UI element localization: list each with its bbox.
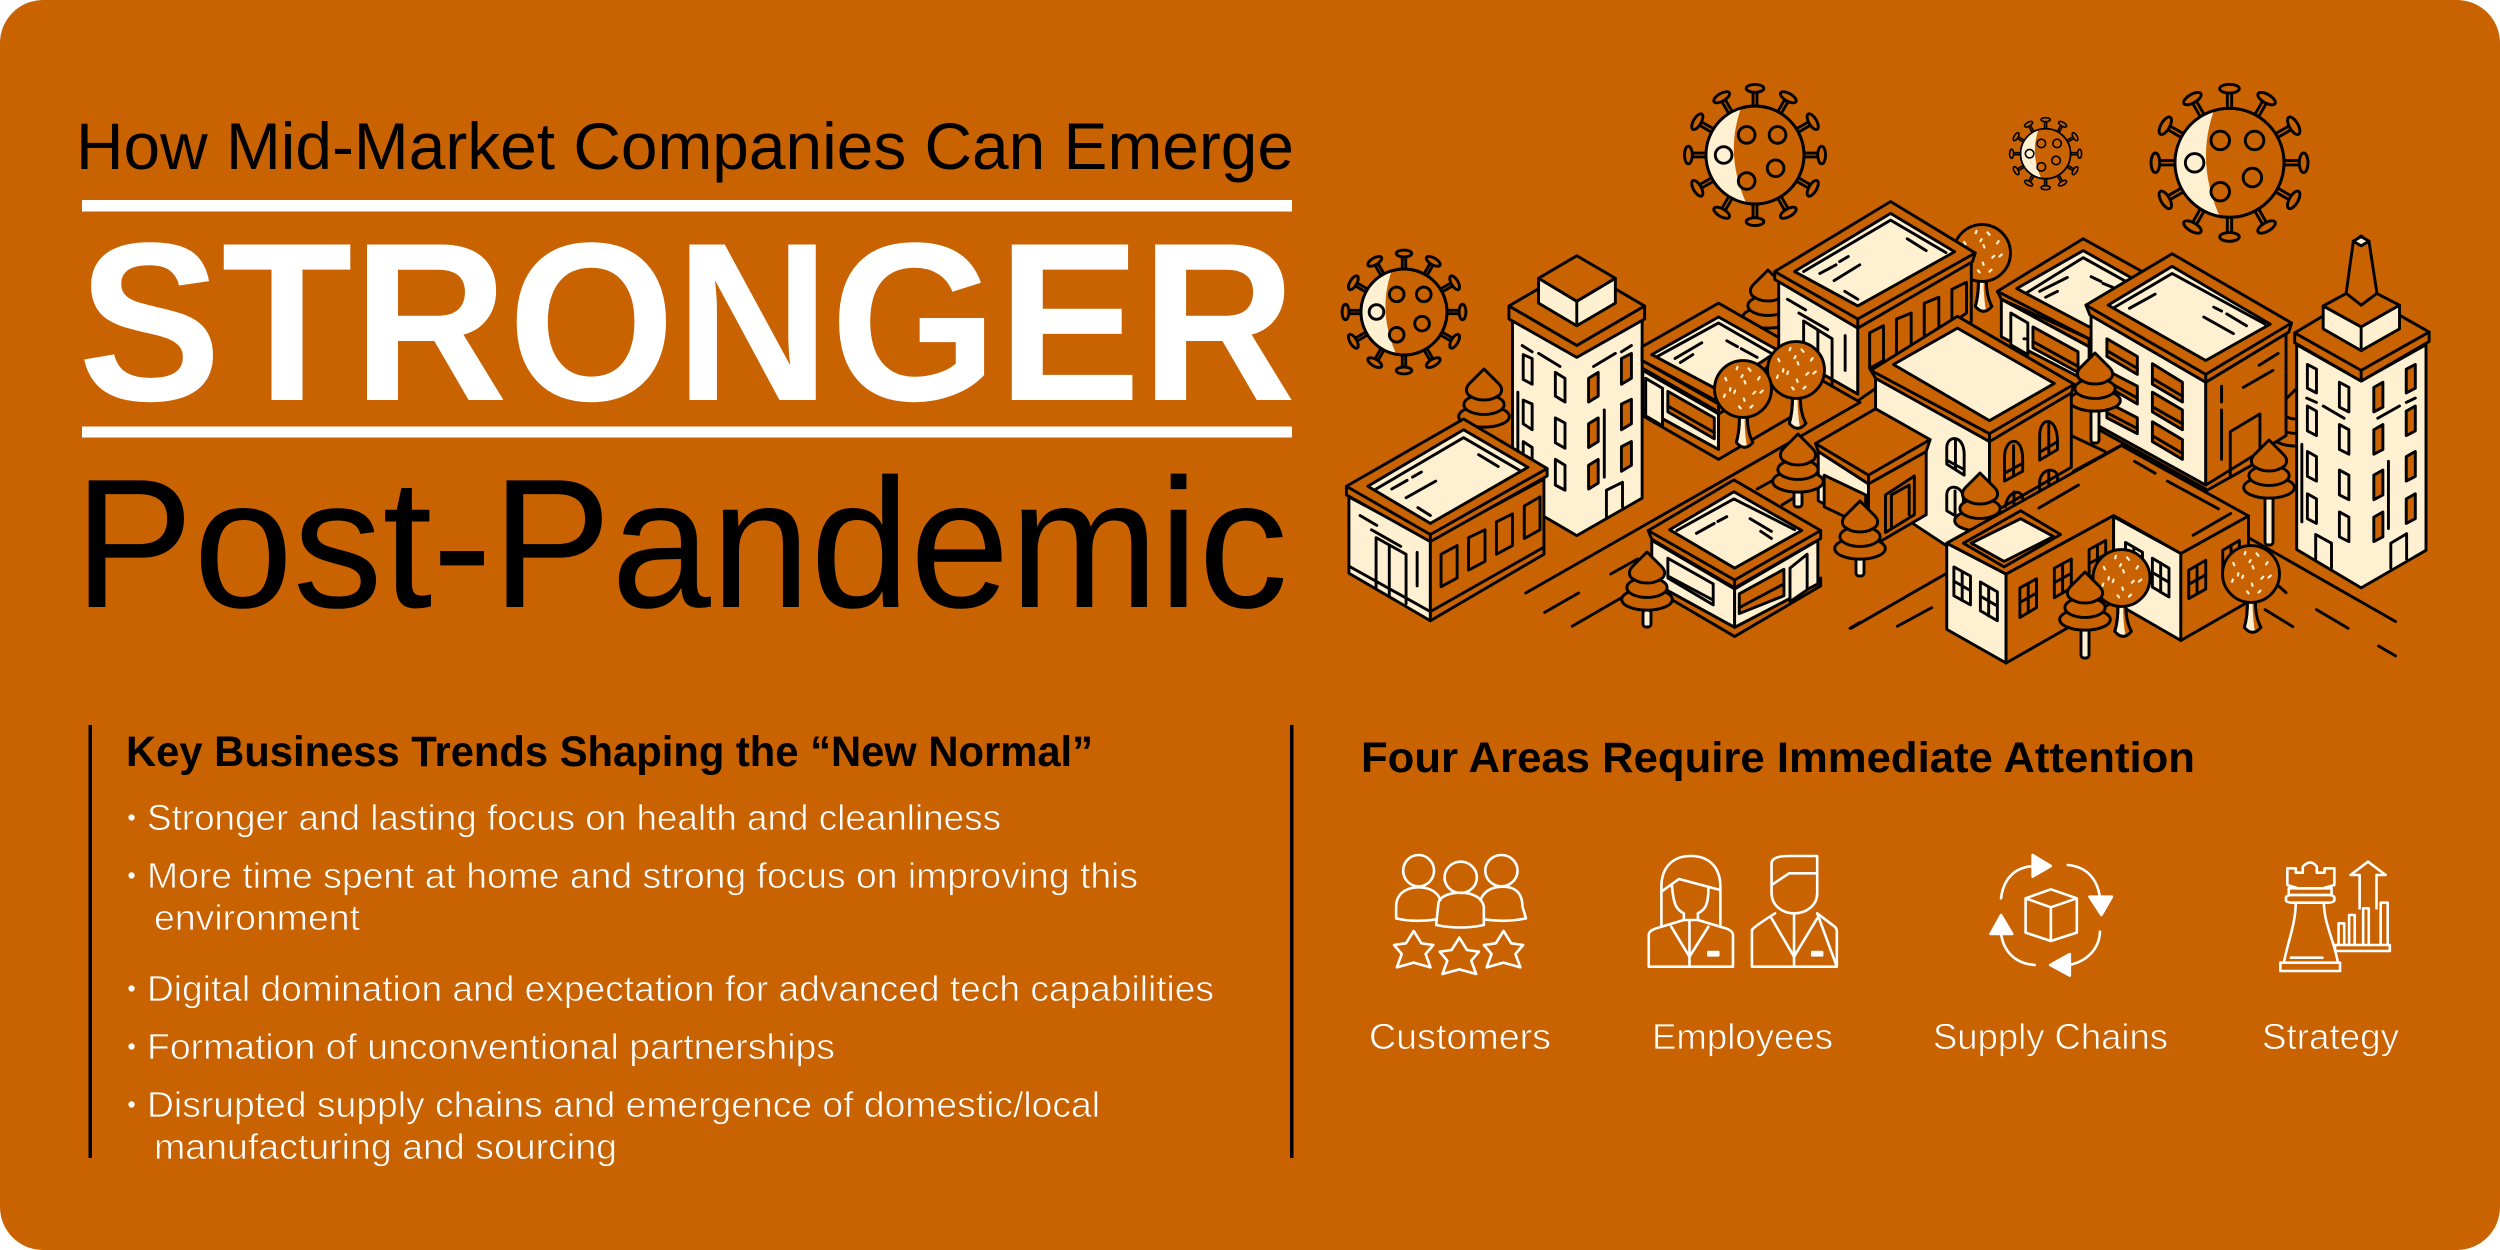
building: right tower	[2295, 236, 2429, 588]
bullet list: •	[127, 802, 136, 832]
roads	[1526, 402, 2396, 656]
tree in front of right tower	[2244, 440, 2294, 545]
bullet list: •	[127, 1031, 136, 1061]
round trees on front building	[2093, 546, 2279, 636]
icon: supply chains	[1991, 855, 2112, 976]
tree between buildings	[2070, 353, 2120, 443]
icon: virus left	[1342, 250, 1466, 374]
building: front centre building	[1648, 480, 1821, 637]
icon: small virus	[2010, 118, 2082, 190]
tree behind low left building	[1459, 369, 1509, 427]
bottom white rule	[82, 426, 1292, 438]
bullet list: manufacturing and sourcing	[154, 1126, 617, 1167]
building: low left building	[1346, 419, 1547, 621]
building: upper centre building	[1775, 202, 1975, 401]
building: tall left tower	[1509, 256, 1645, 536]
bullet list: •	[127, 973, 136, 1003]
bullet list: Disrupted supply chains and emergence of domestic/local	[147, 1084, 1100, 1125]
panel: key business trends	[126, 728, 1214, 1167]
tree beside the road	[1773, 434, 1823, 507]
title line: how mid-market companies can emerge: How Mid-Market Companies Can Emerge	[76, 109, 1294, 183]
title block	[74, 109, 1296, 646]
tree behind right tower	[2272, 388, 2322, 446]
building: upper right small building	[1997, 239, 2156, 382]
bullet list: More time spent at home and strong focus on improving this	[147, 855, 1138, 896]
bullet list: •	[127, 1089, 136, 1119]
top white rule	[82, 200, 1292, 212]
round tree behind upper building	[1954, 225, 2010, 311]
panel: four areas	[1361, 734, 2399, 1057]
bullet list: Digital domination and expectation for advanced tech capabilities	[147, 968, 1214, 1009]
icon: employees	[1649, 856, 1837, 967]
label: strategy: Strategy	[2262, 1016, 2399, 1057]
title word: stronger: STRONGER	[78, 195, 1296, 448]
tree in front of low flat roof building	[1835, 501, 1885, 576]
heading: key business trends: Key Business Trends Shaping the “New Normal”	[126, 728, 1093, 776]
round trees in middle	[1715, 342, 1824, 447]
building: mid-left building	[1642, 303, 1795, 459]
tree next to central building	[1955, 473, 2005, 531]
label: employees: Employees	[1652, 1016, 1833, 1057]
heading: four areas require immediate attention: Four Areas Require Immediate Attention	[1361, 734, 2195, 782]
city illustration	[1342, 84, 2429, 663]
bullet list	[127, 797, 1214, 1167]
icon: customers	[1394, 855, 1526, 974]
building: large right-centre building	[2086, 254, 2292, 489]
label: customers: Customers	[1369, 1016, 1551, 1057]
label: supply chains: Supply Chains	[1933, 1016, 2168, 1057]
vertical divider centre	[1290, 725, 1294, 1158]
tree at front centre	[1622, 552, 1672, 627]
tree at front of L-shaped building	[2060, 572, 2110, 658]
building: central cream-roof building	[1871, 316, 2074, 574]
icon: strategy	[2280, 862, 2390, 971]
icon: large virus top right	[2151, 84, 2308, 241]
bullet list: Stronger and lasting focus on health and cleanliness	[147, 797, 1001, 838]
bullet list: environment	[154, 897, 360, 938]
tree behind upper building	[1743, 270, 1793, 328]
vertical divider left	[88, 725, 92, 1158]
title word: post-pandemic: Post-Pandemic	[74, 440, 1288, 646]
bullet list: Formation of unconventional partnerships	[147, 1026, 835, 1067]
bullet list: •	[127, 860, 136, 890]
building: front L-shaped building	[1947, 446, 2248, 663]
building: low flat roof building	[1815, 409, 1930, 548]
icon: large virus top centre	[1684, 84, 1826, 226]
